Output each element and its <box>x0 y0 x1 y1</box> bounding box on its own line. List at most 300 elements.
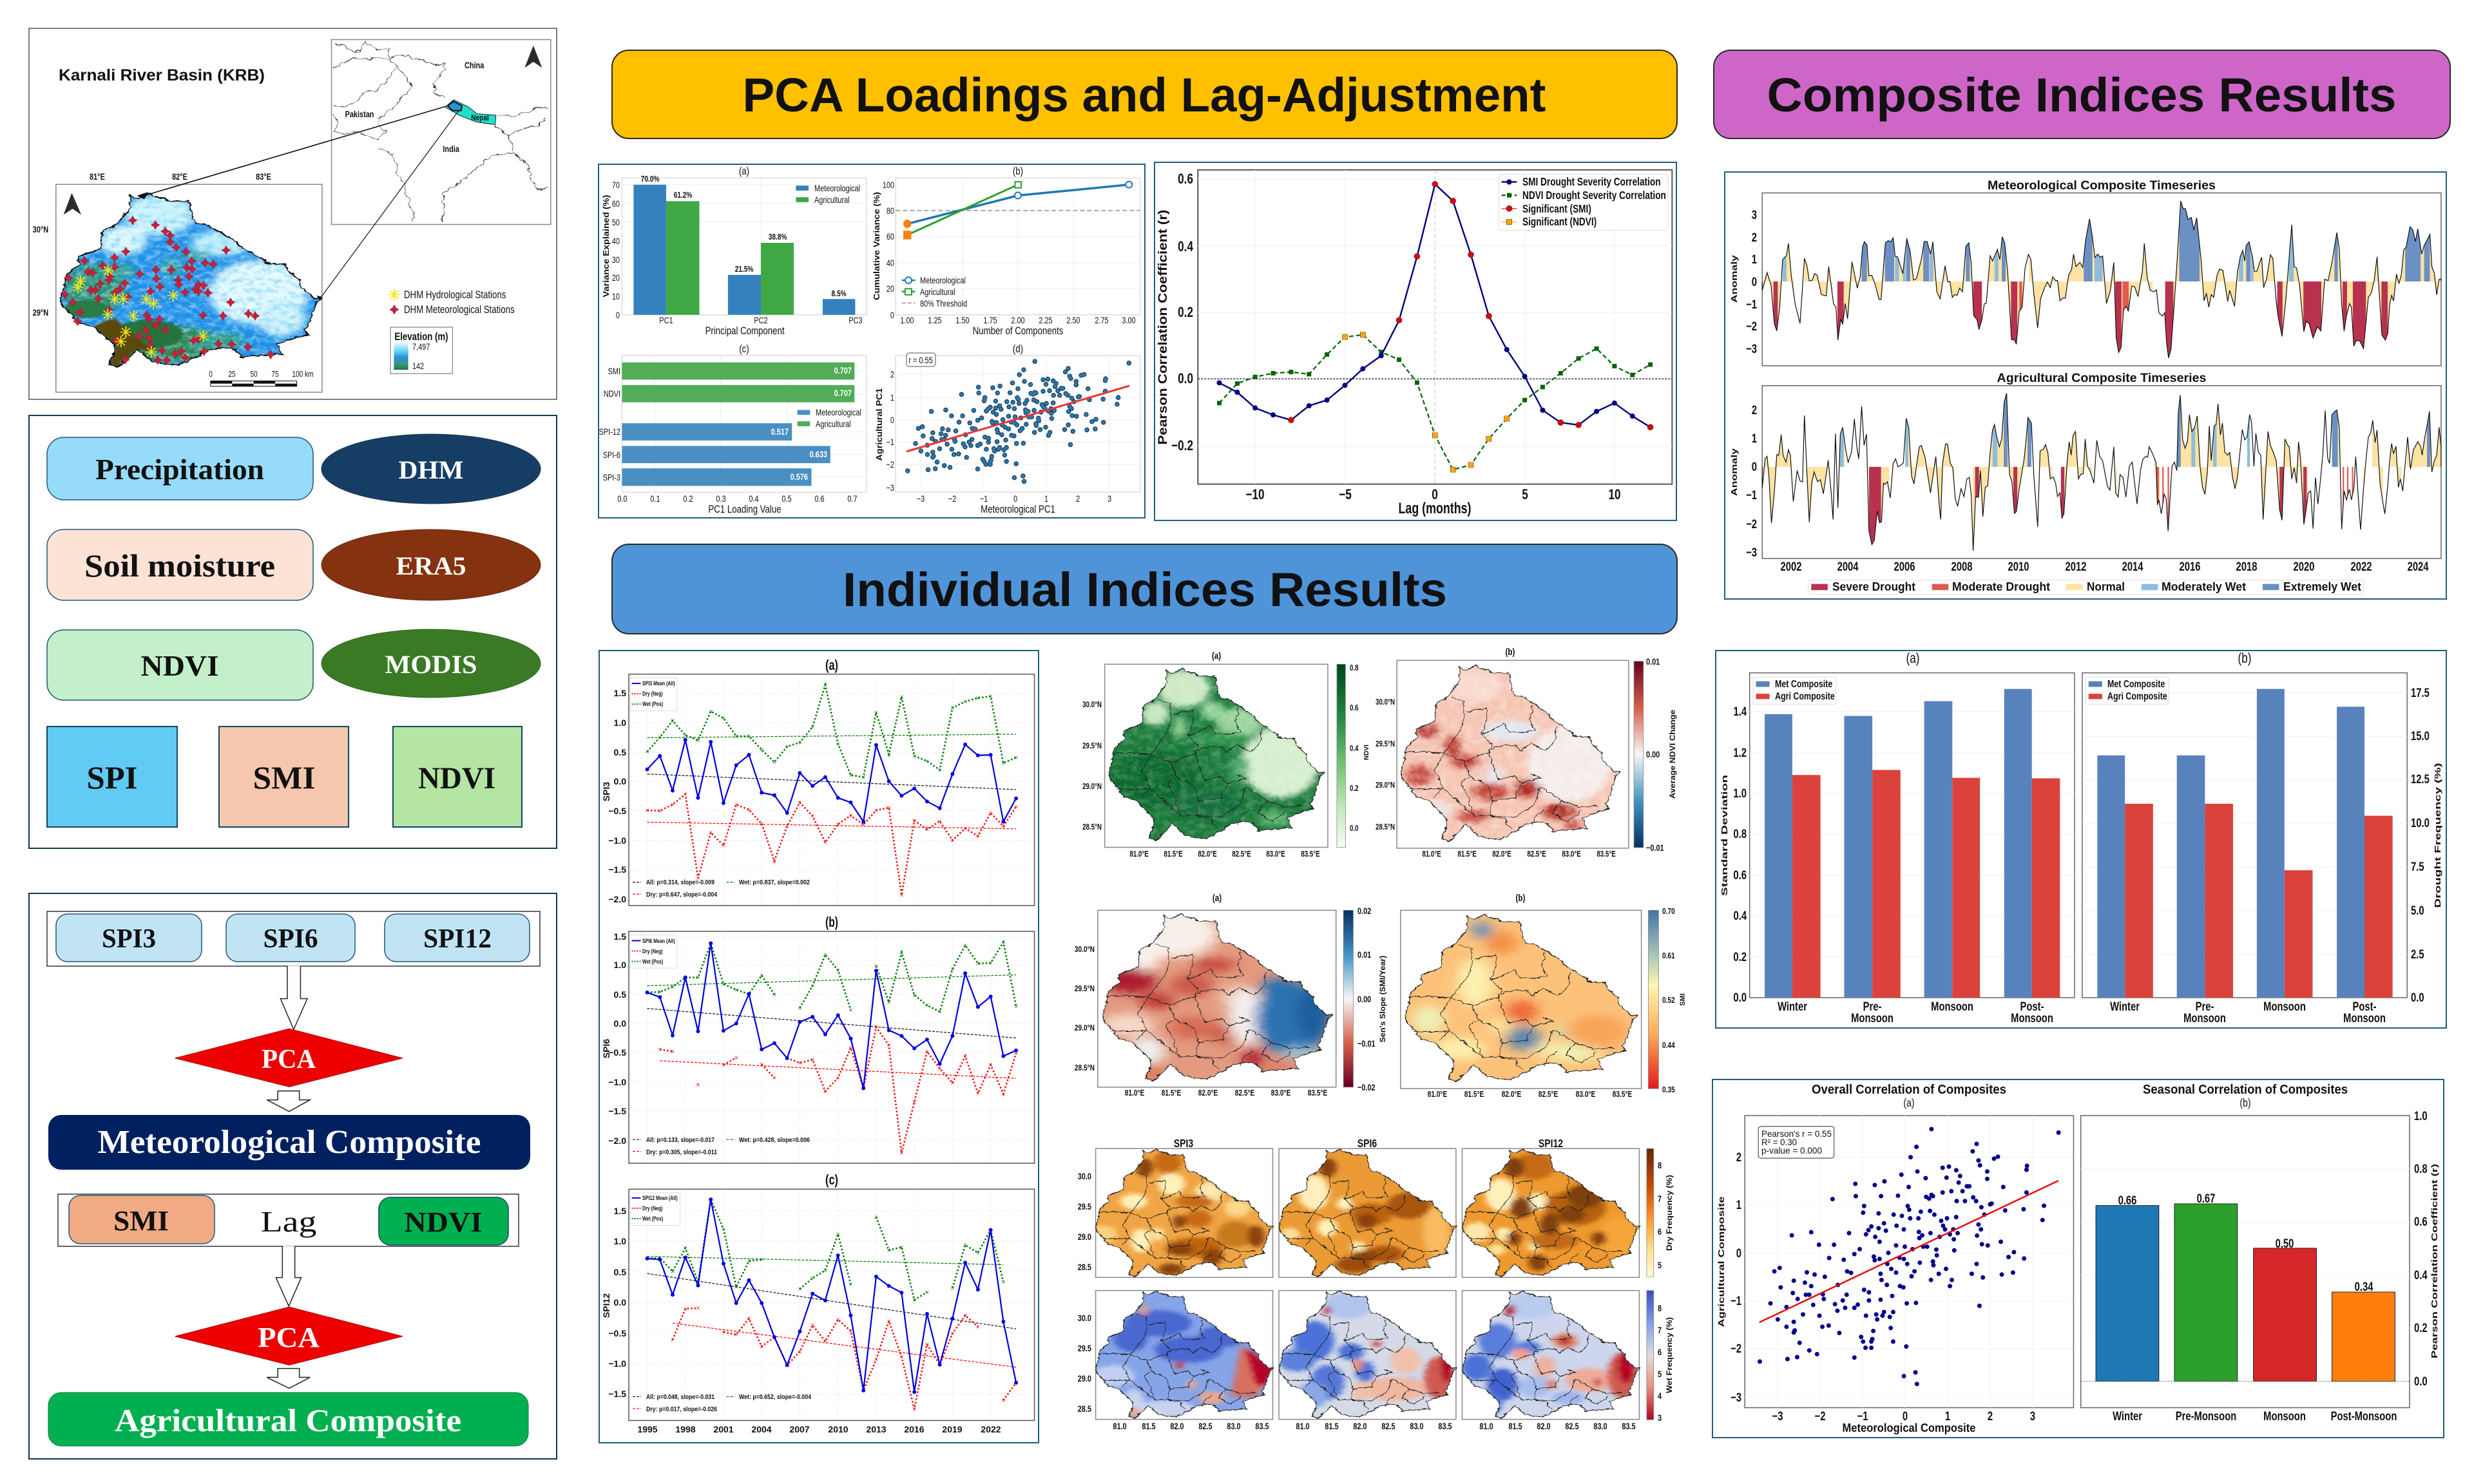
chart a: SPI3 trends: All: p=0.314, slope=-0.009 <box>646 879 714 886</box>
chart a: standard deviation by season: Winter <box>1778 1000 1807 1013</box>
chart: agricultural composite timeseries: 2022 <box>2351 560 2372 573</box>
chart b: SPI6 trends: 1.0 <box>614 960 626 970</box>
wet frequency SPI3 <box>1086 1286 1290 1426</box>
basin elevation map with stations: 0 <box>209 370 213 379</box>
title: Individual Indices Results: Individual Indices Results <box>843 563 1447 616</box>
output: Meteorological Composite: Meteorological Composite <box>98 1124 481 1161</box>
map: average NDVI change: 29.5°N <box>1376 740 1395 748</box>
map: average NDVI change: 83.5°E <box>1597 850 1616 859</box>
chart b: drought frequency by season: Monsoon <box>2263 1000 2306 1013</box>
map: mean NDVI: 0.8 <box>1350 664 1359 672</box>
map: mean NDVI: 0.4 <box>1350 745 1359 753</box>
map grid: dry frequency by SPI scale: 29.0 <box>1078 1232 1091 1242</box>
basin elevation map with stations: 25 <box>228 370 236 379</box>
chart a: overall correlation scatter: Overall Correlation of Composites <box>1812 1083 2006 1097</box>
basin elevation map with stations: 29°N <box>33 308 48 318</box>
chart: meteorological composite timeseries: Meteorological Composite Timeseries <box>1988 179 2216 193</box>
chart a: SPI3 trends: SPI3 <box>601 782 611 801</box>
map: average NDVI change: 30.0°N <box>1376 698 1395 707</box>
chart d: meteorological vs agricultural PC1 scatter: 2 <box>1076 494 1080 504</box>
chart b: cumulative variance lines: 80 <box>887 206 894 216</box>
map: mean SMI: 82.5°E <box>1539 1090 1558 1099</box>
chart b: cumulative variance lines: 2.25 <box>1039 316 1053 325</box>
map grid: dry frequency by SPI scale: SPI6 <box>1357 1137 1377 1150</box>
map grid: wet frequency by SPI scale: 83.5 <box>1438 1422 1452 1431</box>
chart c: PC1 loadings horizontal bars: 0.6 <box>814 494 825 504</box>
chart b: cumulative variance lines: 2.50 <box>1066 316 1080 325</box>
chart c: PC1 loadings horizontal bars: SPI-3 <box>603 473 620 482</box>
legend: lag correlation series: Significant (NDVI) <box>1522 216 1597 228</box>
box: Soil moisture: Soil moisture <box>84 547 275 584</box>
chart c: PC1 loadings horizontal bars: Agricultural <box>816 419 851 429</box>
PCA step two: PCA <box>258 1322 320 1353</box>
chart c: SPI12 trends: 2016 <box>904 1424 925 1434</box>
chart: meteorological composite timeseries <box>1729 179 2441 366</box>
group: SPI inputs <box>47 911 540 966</box>
chart: meteorological composite timeseries: 3 <box>1752 208 1757 222</box>
inset location map: China <box>465 61 484 70</box>
chart b: cumulative variance lines: 1.75 <box>983 316 997 325</box>
chart a: variance explained bars: (a) <box>739 166 749 177</box>
index box: SMI <box>219 727 349 827</box>
map: mean NDVI: 0.6 <box>1350 704 1359 712</box>
map: average NDVI change: 0.00 <box>1646 750 1660 759</box>
chart b: SPI6 trends: 0.5 <box>614 989 626 1000</box>
chart c: PC1 loadings horizontal bars: 0.4 <box>749 494 759 504</box>
group: SPI inputs: SPI3 <box>102 924 156 954</box>
chart b: SPI6 trends: −1.0 <box>608 1077 626 1087</box>
chart b: seasonal correlation bars: Pearson Correlation Coefficient (r) <box>2430 1164 2439 1358</box>
chart a: standard deviation by season: 0.0 <box>1733 991 1747 1004</box>
legend: drought categories: Severe Drought <box>1832 580 1915 593</box>
chart: agricultural composite timeseries: 0 <box>1752 460 1757 473</box>
map grid: wet frequency by SPI scale: 81.0 <box>1113 1422 1127 1431</box>
chart d: meteorological vs agricultural PC1 scatter: 3 <box>1108 494 1111 504</box>
chart a: overall correlation scatter: −2 <box>1815 1409 1825 1423</box>
chart: agricultural composite timeseries: 2004 <box>1837 560 1859 573</box>
inset location map: India <box>443 144 460 154</box>
chart a: standard deviation by season: Monsoon <box>1931 1000 1973 1013</box>
chart: agricultural composite timeseries: 2016 <box>2180 560 2200 573</box>
map: mean NDVI: 29.0°N <box>1082 783 1102 791</box>
map: SMI Sen's slope: Sen's Slope (SMI/Year) <box>1378 956 1387 1042</box>
dry frequency SPI12 <box>1453 1145 1656 1284</box>
chart b: cumulative variance lines: 2.75 <box>1095 316 1109 325</box>
map: mean NDVI: (a) <box>1212 651 1221 661</box>
map: mean NDVI: NDVI <box>1363 745 1370 760</box>
map: mean SMI: SMI <box>1679 993 1687 1006</box>
map grid: dry frequency by SPI scale: SPI12 <box>1539 1137 1563 1150</box>
basin elevation map with stations: 30°N <box>33 225 48 234</box>
chart b: SPI6 trends: Wet (Pos) <box>642 958 663 965</box>
panel: lag correlation chart <box>1155 162 1676 520</box>
chart c: SPI12 trends: 2019 <box>942 1424 963 1434</box>
map: mean SMI: 81.0°E <box>1428 1090 1447 1099</box>
chart c: PC1 loadings horizontal bars: 0.5 <box>782 494 792 504</box>
chart c: SPI12 trends: (c) <box>825 1172 838 1188</box>
chart b: SPI6 trends: (b) <box>825 914 838 930</box>
chart c: PC1 loadings horizontal bars: 0.517 <box>771 427 789 437</box>
chart b: seasonal correlation bars: Seasonal Correlation of Composites <box>2143 1083 2348 1097</box>
map grid: wet frequency by SPI scale: 81.5 <box>1508 1422 1522 1431</box>
map legend: stations and elevation: DHM Hydrological Stations <box>404 289 506 301</box>
chart b: seasonal correlation bars: Winter <box>2113 1409 2142 1423</box>
chart c: SPI12 trends: All: p=0.048, slope=-0.031 <box>646 1393 714 1401</box>
chart a: overall correlation scatter: Pearson's r = 0.55 <box>1761 1128 1832 1139</box>
map: mean SMI: 82.0°E <box>1502 1090 1521 1099</box>
basin elevation map with stations: 81°E <box>90 172 105 182</box>
chart a: SPI3 trends <box>601 657 1035 906</box>
axis labels: 10 <box>1608 487 1621 503</box>
panel: PCA variance and loadings charts <box>599 164 1145 518</box>
chart b: drought frequency by season: Monsoon <box>2343 1011 2386 1025</box>
chart b: SPI6 trends: All: p=0.133, slope=-0.017 <box>646 1136 714 1144</box>
chart a: SPI3 trends: SPI3 Mean (All) <box>642 680 675 687</box>
chart b: seasonal correlation bars <box>2081 1083 2439 1423</box>
chart b: seasonal correlation bars: 0.4 <box>2414 1268 2428 1282</box>
map grid: wet frequency by SPI scale: 83.5 <box>1622 1422 1636 1431</box>
map grid: wet frequency by SPI scale <box>1078 1286 1674 1431</box>
inset location map: Nepal <box>471 113 489 122</box>
box: NDVI variable <box>47 630 313 700</box>
map grid: wet frequency by SPI scale: 82.0 <box>1170 1422 1184 1431</box>
chart b: cumulative variance lines: Number of Components <box>973 325 1064 337</box>
map: average NDVI change: −0.01 <box>1646 843 1664 853</box>
map: average NDVI change: 29.0°N <box>1376 781 1395 790</box>
chart b: SPI6 trends: SPI6 Mean (All) <box>642 938 675 944</box>
map grid: wet frequency by SPI scale: 83.0 <box>1410 1422 1424 1431</box>
map grid: wet frequency by SPI scale: 82.0 <box>1353 1422 1367 1431</box>
chart c: PC1 loadings horizontal bars: NDVI <box>604 389 620 399</box>
chart b: cumulative variance lines: Agricultural <box>920 287 955 297</box>
map grid: wet frequency by SPI scale: 7 <box>1658 1326 1662 1335</box>
source oval: DHM <box>321 434 541 504</box>
chart b: seasonal correlation bars: 0.0 <box>2414 1375 2428 1388</box>
chart a: SPI3 trends: Wet (Pos) <box>642 701 663 707</box>
chart a: variance explained bars: 38.8% <box>769 233 787 242</box>
chart b: SPI6 trends: −1.5 <box>608 1106 626 1116</box>
chart: agricultural composite timeseries: 2020 <box>2294 560 2314 573</box>
legend: lag correlation series: SMI Drought Severity Correlation <box>1522 176 1661 188</box>
map legend: stations and elevation <box>390 289 515 374</box>
map: mean SMI: 81.5°E <box>1464 1090 1484 1099</box>
map grid: wet frequency by SPI scale: 3 <box>1658 1413 1662 1423</box>
group: SMI, lag, NDVI: SMI <box>113 1205 169 1237</box>
chart b: cumulative variance lines: 1.00 <box>900 316 914 325</box>
box: Precipitation <box>47 437 313 500</box>
chart b: SPI6 trends: SPI6 <box>601 1039 611 1058</box>
chart: agricultural composite timeseries: −2 <box>1746 517 1757 531</box>
chart c: SPI12 trends: Dry: p=0.017, slope=-0.026 <box>646 1405 717 1413</box>
chart b: drought frequency by season: Met Composite <box>2107 679 2165 690</box>
chart: meteorological composite timeseries: Anomaly <box>1729 254 1739 303</box>
chart c: PC1 loadings horizontal bars: 0.707 <box>834 388 852 398</box>
chart a: variance explained bars: 61.2% <box>674 191 693 200</box>
map: average NDVI change: 81.5°E <box>1457 850 1477 859</box>
chart c: SPI12 trends: 0.0 <box>614 1297 626 1308</box>
chart c: PC1 loadings horizontal bars: 0.707 <box>834 366 852 376</box>
map: SMI Sen's slope: 30.0°N <box>1075 945 1095 954</box>
chart d: meteorological vs agricultural PC1 scatter: 2 <box>890 370 894 379</box>
arrow: SPI inputs to PCA <box>280 966 307 1029</box>
chart: agricultural composite timeseries: 2024 <box>2408 560 2429 573</box>
chart b: drought frequency by season: Monsoon <box>2183 1011 2226 1025</box>
map grid: wet frequency by SPI scale: 28.5 <box>1078 1404 1091 1414</box>
chart d: meteorological vs agricultural PC1 scatter: −2 <box>948 494 956 504</box>
axis labels: −5 <box>1339 487 1352 503</box>
chart c: SPI12 trends: 1.0 <box>614 1236 626 1246</box>
chart c: SPI12 trends: −0.5 <box>608 1328 626 1338</box>
legend: drought categories: Extremely Wet <box>2283 580 2361 593</box>
map legend: stations and elevation: Elevation (m) <box>394 331 448 343</box>
chart: agricultural composite timeseries: −1 <box>1746 488 1757 502</box>
map grid: dry frequency by SPI scale <box>1078 1137 1674 1284</box>
group: SMI, lag, NDVI: Lag <box>260 1205 317 1238</box>
chart: agricultural composite timeseries: −3 <box>1746 546 1757 559</box>
map: mean NDVI: 28.5°N <box>1082 823 1102 832</box>
chart: agricultural composite timeseries: 2014 <box>2122 560 2143 573</box>
chart b: SPI6 trends <box>601 914 1035 1163</box>
map: average NDVI change: 28.5°N <box>1376 823 1395 832</box>
chart b: cumulative variance lines: 40 <box>887 258 894 268</box>
map grid: wet frequency by SPI scale: 82.5 <box>1381 1422 1395 1431</box>
chart c: SPI12 trends: 2007 <box>789 1424 810 1434</box>
group: SMI, lag, NDVI: NDVI <box>405 1206 482 1238</box>
map grid: dry frequency by SPI scale: 28.5 <box>1078 1262 1091 1272</box>
chart c: SPI12 trends: 1.5 <box>614 1206 626 1216</box>
panel: study area map <box>29 28 557 399</box>
map: mean NDVI: 0.0 <box>1350 824 1359 833</box>
panel: datasets and sources <box>29 415 557 848</box>
map: mean NDVI: 83.0°E <box>1266 850 1285 859</box>
map grid: wet frequency by SPI scale: 83.5 <box>1255 1422 1269 1431</box>
arrow: PCA to agricultural composite <box>267 1369 310 1388</box>
map: SMI Sen's slope: −0.01 <box>1357 1039 1376 1049</box>
chart a: overall correlation scatter: −3 <box>1772 1409 1783 1423</box>
map grid: wet frequency by SPI scale: Wet Frequency (%) <box>1665 1317 1674 1393</box>
map: mean NDVI <box>1082 651 1370 859</box>
title: Composite Indices Results <box>1714 50 2450 138</box>
chart a: SPI3 trends: 0.5 <box>614 747 626 757</box>
map grid: wet frequency by SPI scale: 29.0 <box>1078 1374 1091 1384</box>
chart: agricultural composite timeseries: 2002 <box>1781 560 1801 573</box>
chart: meteorological composite timeseries: 0 <box>1752 275 1757 289</box>
chart b: seasonal correlation bars: 0.8 <box>2414 1162 2428 1175</box>
map: SMI Sen's slope: 81.0°E <box>1125 1089 1144 1098</box>
chart a: standard deviation by season: (a) <box>1906 651 1919 667</box>
chart b: drought frequency by season: (b) <box>2238 651 2251 667</box>
basin elevation map with stations: 82°E <box>172 172 187 182</box>
chart a: overall correlation scatter: 0 <box>1736 1246 1741 1260</box>
title: PCA Loadings and Lag-Adjustment <box>612 50 1677 138</box>
chart: meteorological composite timeseries: −2 <box>1746 319 1757 333</box>
chart b: cumulative variance lines: 20 <box>887 284 894 294</box>
chart b: drought frequency by season: 15.0 <box>2411 729 2430 743</box>
chart b: cumulative variance lines: 60 <box>887 232 894 242</box>
chart d: meteorological vs agricultural PC1 scatter: 0 <box>890 415 894 425</box>
chart a: variance explained bars: 20 <box>612 273 620 283</box>
chart b: drought frequency by season: Post- <box>2352 1000 2377 1013</box>
basin elevation map with stations: 75 <box>271 370 279 379</box>
map grid: wet frequency by SPI scale: 30.0 <box>1078 1313 1091 1323</box>
chart b: cumulative variance lines: 100 <box>883 180 894 190</box>
chart a: overall correlation scatter: 2 <box>1988 1409 1993 1423</box>
map: mean SMI: 0.35 <box>1662 1085 1675 1094</box>
map legend: stations and elevation: DHM Meteorological Stations <box>404 304 515 316</box>
chart b: drought frequency by season: Winter <box>2110 1000 2140 1013</box>
title: Individual Indices Results <box>612 544 1677 634</box>
map: mean SMI: 0.52 <box>1662 996 1675 1005</box>
legend: lag correlation series: NDVI Drought Severity Correlation <box>1522 190 1666 202</box>
chart b: seasonal correlation bars: Post-Monsoon <box>2331 1409 2397 1423</box>
chart b: cumulative variance lines: (b) <box>1013 166 1023 177</box>
chart b: seasonal correlation bars: (b) <box>2239 1096 2251 1109</box>
chart b: cumulative variance lines: 1.25 <box>928 316 942 325</box>
map grid: dry frequency by SPI scale: Dry Frequency (%) <box>1665 1175 1674 1251</box>
map grid: dry frequency by SPI scale: 6 <box>1658 1227 1662 1237</box>
chart b: seasonal correlation bars: 0.50 <box>2276 1237 2294 1250</box>
chart d: meteorological vs agricultural PC1 scatter: Meteorological PC1 <box>981 504 1055 515</box>
map grid: wet frequency by SPI scale: 81.0 <box>1296 1422 1310 1431</box>
chart c: SPI12 trends: Wet (Pos) <box>642 1215 663 1222</box>
chart b: seasonal correlation bars: 0.2 <box>2414 1321 2428 1335</box>
map: SMI Sen's slope: 0.01 <box>1357 950 1371 960</box>
chart d: meteorological vs agricultural PC1 scatter: −1 <box>887 437 894 447</box>
chart c: SPI12 trends: 0.5 <box>614 1267 626 1277</box>
dry frequency SPI3 <box>1095 1148 1274 1277</box>
chart b: seasonal correlation bars: 0.34 <box>2355 1280 2373 1293</box>
box: Precipitation: Precipitation <box>95 453 264 486</box>
map: mean NDVI: 82.0°E <box>1198 850 1217 859</box>
chart d: meteorological vs agricultural PC1 scatter: 1 <box>890 393 894 403</box>
chart b: cumulative variance lines: 0 <box>890 310 894 320</box>
chart b: SPI6 trends: −0.5 <box>608 1047 626 1058</box>
chart a: standard deviation by season: Monsoon <box>1851 1011 1894 1025</box>
PCA step one <box>175 1029 403 1087</box>
map: average NDVI change: 0.01 <box>1646 657 1660 667</box>
map: mean SMI: 0.70 <box>1662 907 1675 916</box>
chart c: SPI12 trends: Dry (Neg) <box>642 1205 663 1212</box>
PCA step one: PCA <box>262 1045 316 1074</box>
map grid: wet frequency by SPI scale: 81.5 <box>1142 1422 1156 1431</box>
map: mean SMI: (b) <box>1516 893 1525 903</box>
title: PCA Loadings and Lag-Adjustment: PCA Loadings and Lag-Adjustment <box>742 68 1546 122</box>
basin elevation map with stations: 100 km <box>292 370 314 379</box>
chart a: standard deviation by season: 0.8 <box>1733 827 1747 841</box>
chart c: SPI12 trends: 2004 <box>751 1424 772 1434</box>
chart a: standard deviation by season: 1.2 <box>1733 746 1747 759</box>
map: average NDVI change: Average NDVI Change <box>1668 710 1677 799</box>
chart b: drought frequency by season: 12.5 <box>2411 772 2430 786</box>
map: mean NDVI: 0.2 <box>1350 785 1359 793</box>
chart d: meteorological vs agricultural PC1 scatter: 0 <box>1013 494 1017 504</box>
box: Soil moisture <box>47 529 313 600</box>
chart a: variance explained bars: Principal Component <box>705 325 785 337</box>
box: NDVI variable: NDVI <box>140 649 219 682</box>
chart c: PC1 loadings horizontal bars: 0.633 <box>810 450 827 459</box>
arrow: lag to PCA <box>276 1246 302 1306</box>
chart c: SPI12 trends: −1.5 <box>608 1389 626 1399</box>
inset location map <box>332 39 551 225</box>
chart a: SPI3 trends: −2.0 <box>608 894 626 904</box>
map: mean NDVI: 82.5°E <box>1232 850 1251 859</box>
chart a: overall correlation scatter: −1 <box>1857 1409 1868 1423</box>
chart a: SPI3 trends: −0.5 <box>608 806 626 816</box>
map legend: stations and elevation: 7,497 <box>412 342 430 352</box>
chart: agricultural composite timeseries: Anomaly <box>1729 448 1739 496</box>
map: SMI Sen's slope: 82.5°E <box>1235 1089 1254 1098</box>
map grid: wet frequency by SPI scale: 6 <box>1658 1347 1662 1357</box>
legend: drought categories: Normal <box>2087 580 2125 593</box>
map: average NDVI change <box>1376 647 1677 859</box>
chart a: variance explained bars: Agricultural <box>814 195 850 205</box>
chart a: variance explained bars: PC2 <box>754 316 768 325</box>
chart d: meteorological vs agricultural PC1 scatter <box>874 343 1140 515</box>
chart c: SPI12 trends: 2010 <box>828 1424 849 1434</box>
wet frequency SPI12 <box>1453 1286 1656 1426</box>
chart c: PC1 loadings horizontal bars <box>599 343 867 515</box>
map grid: wet frequency by SPI scale: 82.0 <box>1537 1422 1551 1431</box>
chart: agricultural composite timeseries: 2008 <box>1951 560 1972 573</box>
chart c: PC1 loadings horizontal bars: 0.1 <box>650 494 660 504</box>
map: mean NDVI: 30.0°N <box>1082 701 1102 709</box>
panel: composite time series <box>1725 172 2446 599</box>
chart a: variance explained bars: 21.5% <box>735 265 754 274</box>
chart a: SPI3 trends: −1.0 <box>608 835 626 846</box>
axis labels: −10 <box>1245 487 1265 503</box>
chart d: meteorological vs agricultural PC1 scatter: −3 <box>887 483 894 493</box>
chart c: PC1 loadings horizontal bars: SPI-6 <box>603 450 620 460</box>
chart a: standard deviation by season: 0.4 <box>1734 909 1747 922</box>
map grid: dry frequency by SPI scale: 7 <box>1658 1194 1662 1204</box>
basin elevation map with stations: 83°E <box>256 172 271 182</box>
chart: meteorological composite timeseries: 1 <box>1752 252 1757 266</box>
chart a: variance explained bars: 70 <box>612 180 620 190</box>
chart a: standard deviation by season: Pre- <box>1863 1000 1881 1013</box>
chart c: SPI12 trends: 1998 <box>675 1424 696 1434</box>
chart a: variance explained bars: 50 <box>612 218 620 227</box>
chart b: cumulative variance lines: 80% Threshold <box>920 299 967 309</box>
chart a: variance explained bars: Variance Explained (%) <box>601 195 611 298</box>
map: average NDVI change: 82.5°E <box>1527 850 1546 859</box>
group: SPI inputs: SPI12 <box>423 924 492 954</box>
map grid: wet frequency by SPI scale: 8 <box>1658 1304 1662 1313</box>
axis labels: −0.2 <box>1171 438 1193 454</box>
map: average NDVI change: 82.0°E <box>1492 850 1511 859</box>
map grid: wet frequency by SPI scale: 4 <box>1658 1391 1662 1401</box>
chart: agricultural composite timeseries: 2 <box>1752 403 1757 417</box>
chart c: PC1 loadings horizontal bars: Meteorological <box>816 408 861 417</box>
chart b: drought frequency by season: Agri Composite <box>2107 691 2167 702</box>
chart a: overall correlation scatter: −1 <box>1731 1294 1741 1308</box>
chart b: seasonal correlation bars: Pre-Monsoon <box>2176 1409 2236 1423</box>
chart b: SPI6 trends: 0.0 <box>614 1018 626 1029</box>
chart: agricultural composite timeseries: 1 <box>1752 432 1757 445</box>
chart b: SPI6 trends: Dry (Neg) <box>642 948 663 955</box>
index box: NDVI: NDVI <box>418 761 495 795</box>
chart c: SPI12 trends: 2013 <box>866 1424 887 1434</box>
index box: SPI <box>47 727 177 827</box>
chart a: overall correlation scatter: 3 <box>2030 1409 2035 1423</box>
chart b: cumulative variance lines: Cumulative Variance (%) <box>872 192 881 300</box>
panel: SPI time series <box>599 651 1039 1443</box>
map grid: wet frequency by SPI scale: 81.0 <box>1479 1422 1493 1431</box>
chart c: SPI12 trends: 1995 <box>637 1424 658 1434</box>
chart b: seasonal correlation bars: Monsoon <box>2263 1409 2306 1423</box>
chart a: overall correlation scatter: Agricultural Composite <box>1716 1197 1726 1327</box>
chart b: drought frequency by season: 0.0 <box>2411 991 2424 1004</box>
chart: agricultural composite timeseries: 2012 <box>2066 560 2086 573</box>
